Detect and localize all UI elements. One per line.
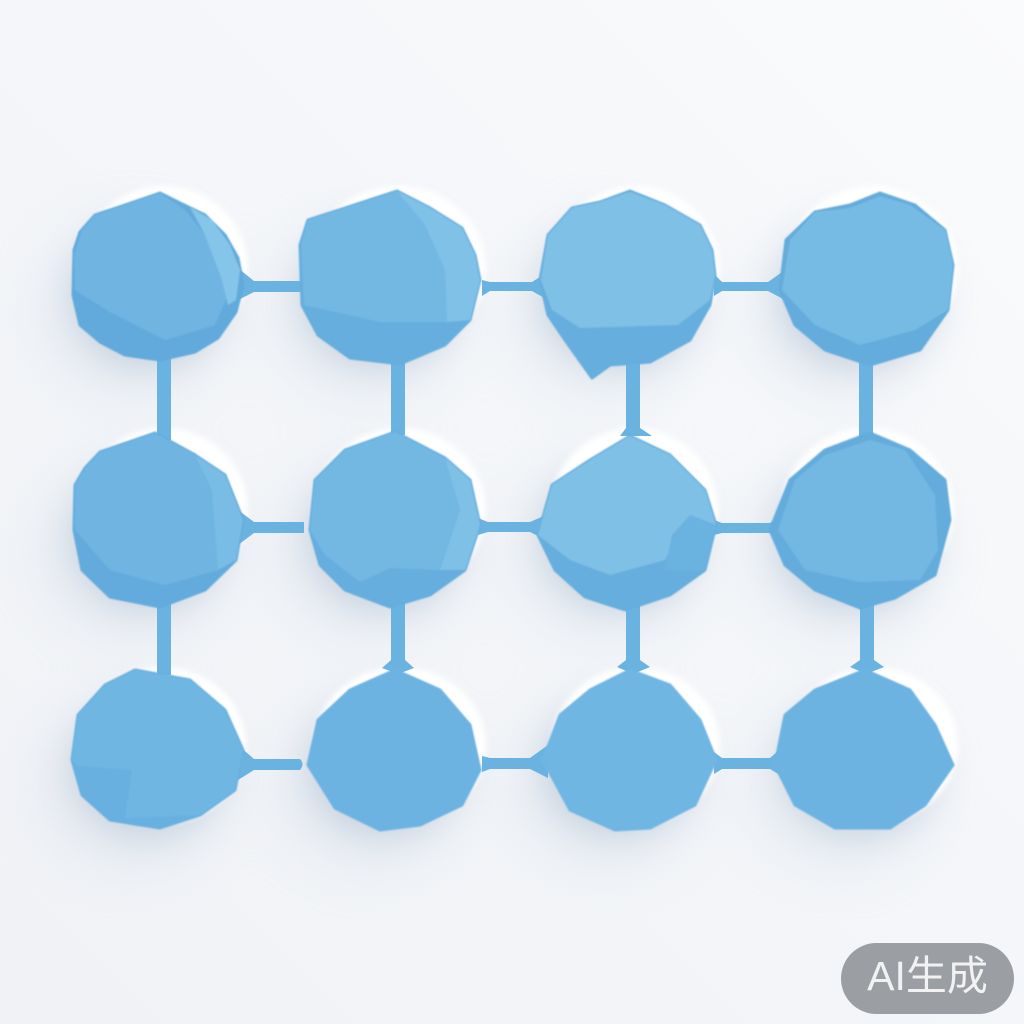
node row 3 column 1 [72,670,243,828]
node row 3 column 3 [543,670,716,830]
node row 3 column 2 [308,670,480,830]
node row 2 column 2 [310,432,480,607]
connectors [157,268,884,780]
soft shadows [42,186,958,865]
node row 1 column 2 [300,191,480,364]
node row 1 column 1 [73,193,243,360]
node row 2 column 3 [538,436,716,610]
node row 2 column 1 [74,433,243,607]
node row 2 column 4 [770,433,950,608]
node row 1 column 3 [540,191,715,378]
node row 3 column 4 [775,670,953,828]
badge: AI generated: AI生成 [867,953,988,999]
node row 1 column 4 [780,193,953,365]
badge: AI generated [841,943,1014,1014]
